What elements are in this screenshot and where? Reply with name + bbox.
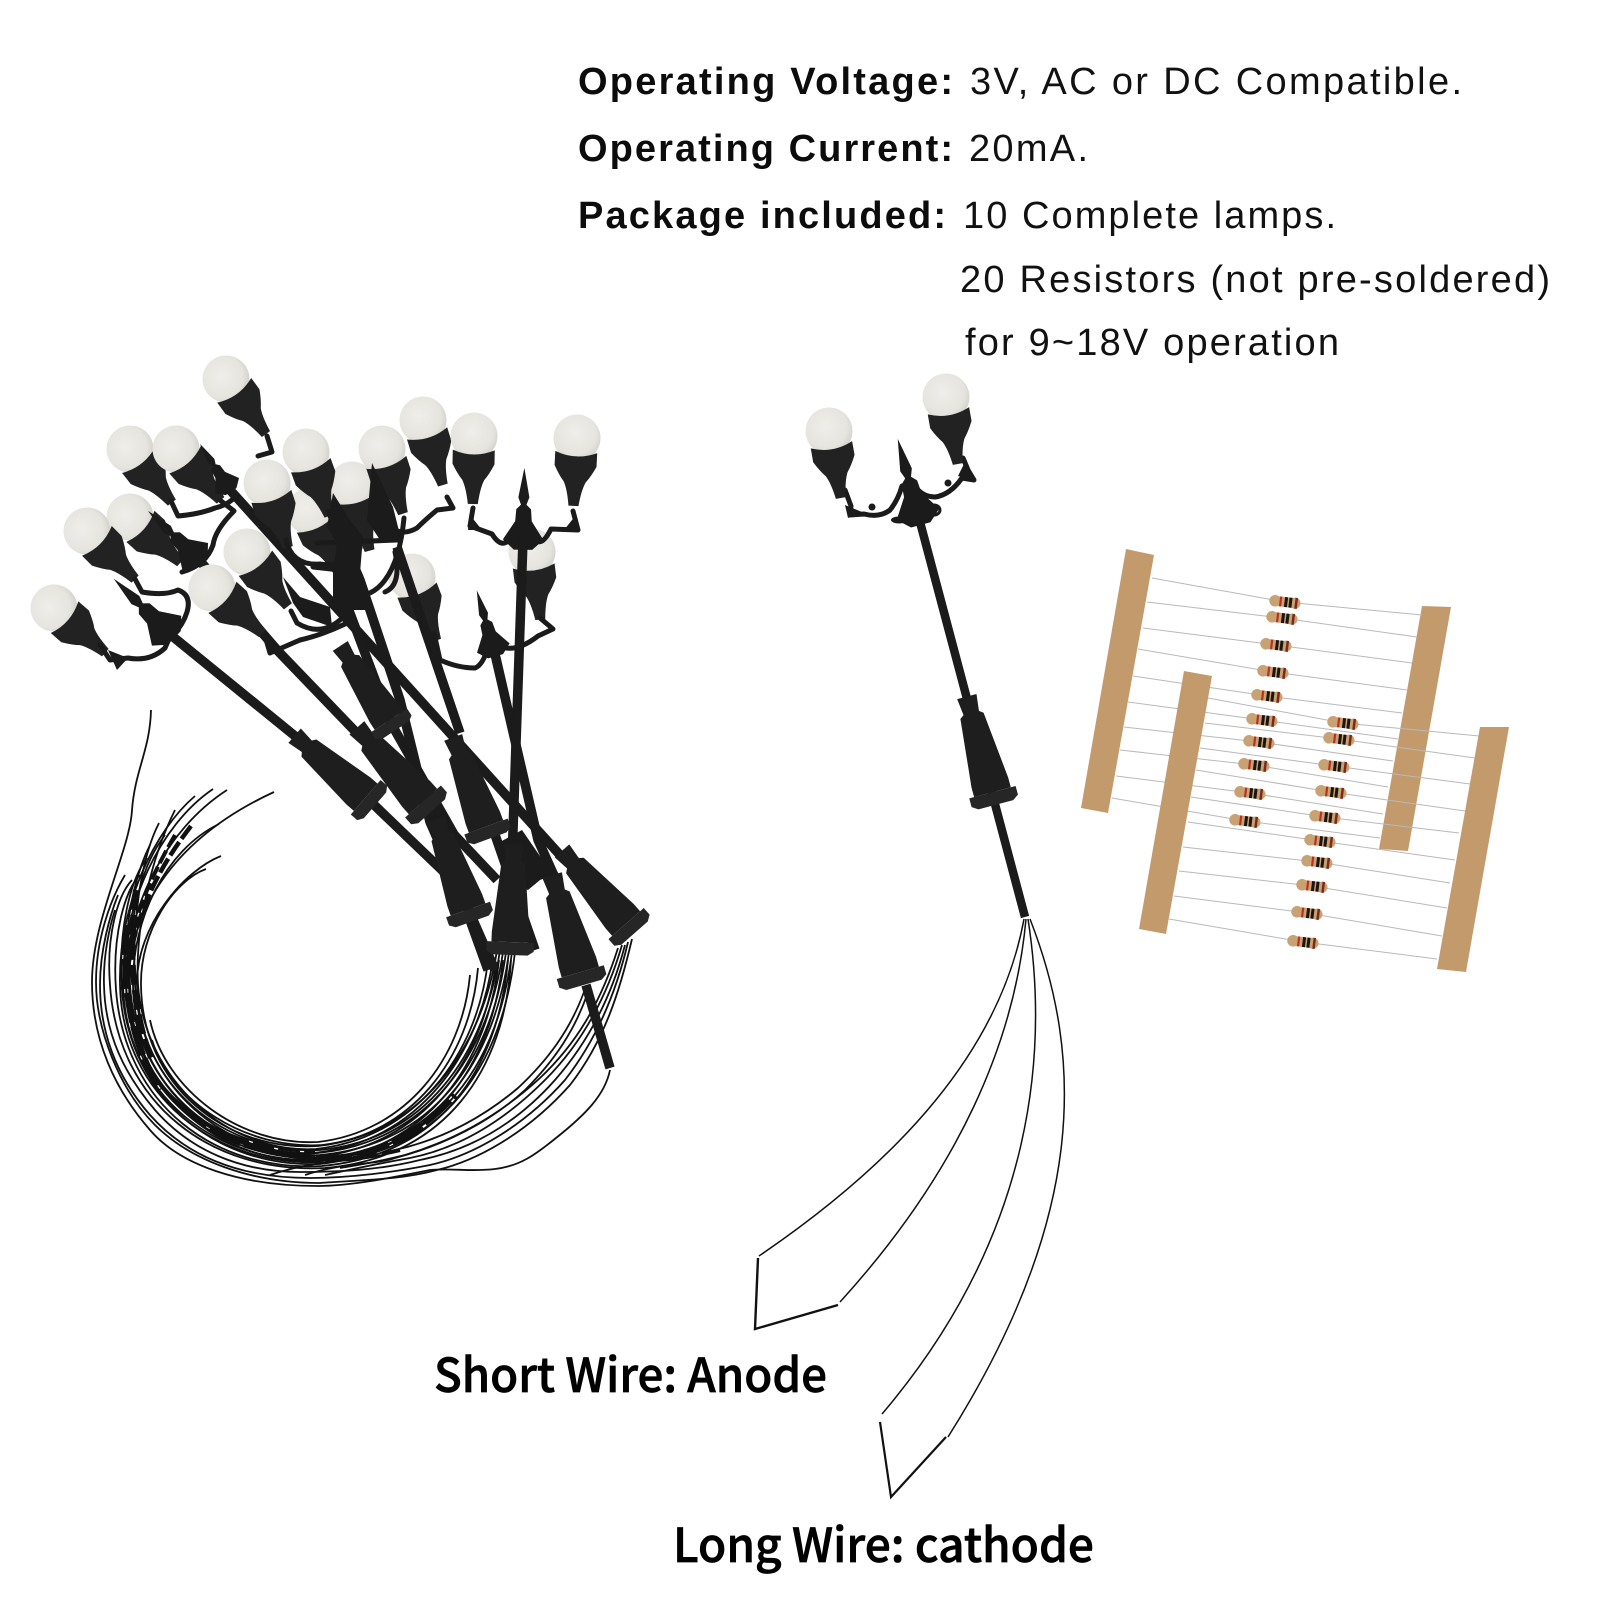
lamp bundle bulbs (21, 346, 602, 670)
package included line (578, 195, 1336, 237)
resistors line: 20 Resistors (not pre-soldered) (960, 259, 1550, 301)
back bulbs of the bundle (97, 456, 564, 649)
specification text block (578, 61, 1550, 364)
left bulb (802, 404, 864, 502)
label: long wire cathode: Long Wire: cathode (673, 1507, 1094, 1576)
lamp bundle arms and finials (99, 436, 578, 670)
lamp bundle wires (92, 710, 632, 1186)
lamp bracket arms (845, 458, 975, 524)
front tapes (1139, 671, 1509, 972)
operating voltage line: 3V, AC or DC Compatible. (970, 61, 1462, 103)
first strip resistors (1229, 594, 1301, 829)
operating current line: 20mA. (969, 128, 1088, 170)
second strip leads (1169, 698, 1479, 959)
first strip leads (1112, 578, 1422, 838)
lamp wire: short anode pair (755, 919, 1026, 1329)
resistor strips (1081, 549, 1509, 972)
lamp base (944, 690, 1019, 811)
right bulb (919, 370, 981, 468)
center lamp with wires (755, 370, 1064, 1497)
package included line: Package included: (578, 195, 946, 237)
lamp pole (920, 522, 1025, 917)
lamp bundle front poles and bases (172, 540, 652, 1068)
resistor voltage line: for 9~18V operation (965, 322, 1339, 364)
operating voltage line: Operating Voltage: (578, 61, 953, 103)
lamp bundle back poles (200, 490, 560, 970)
label: short wire anode: Short Wire: Anode (434, 1337, 827, 1406)
operating voltage line (578, 61, 1462, 103)
back tapes (1081, 549, 1451, 851)
operating current line: Operating Current: (578, 128, 953, 170)
package included line: 10 Complete lamps. (963, 195, 1336, 237)
lamp wire: long cathode pair (880, 919, 1064, 1497)
lamp finial (876, 433, 942, 531)
second strip resistors (1287, 715, 1359, 950)
